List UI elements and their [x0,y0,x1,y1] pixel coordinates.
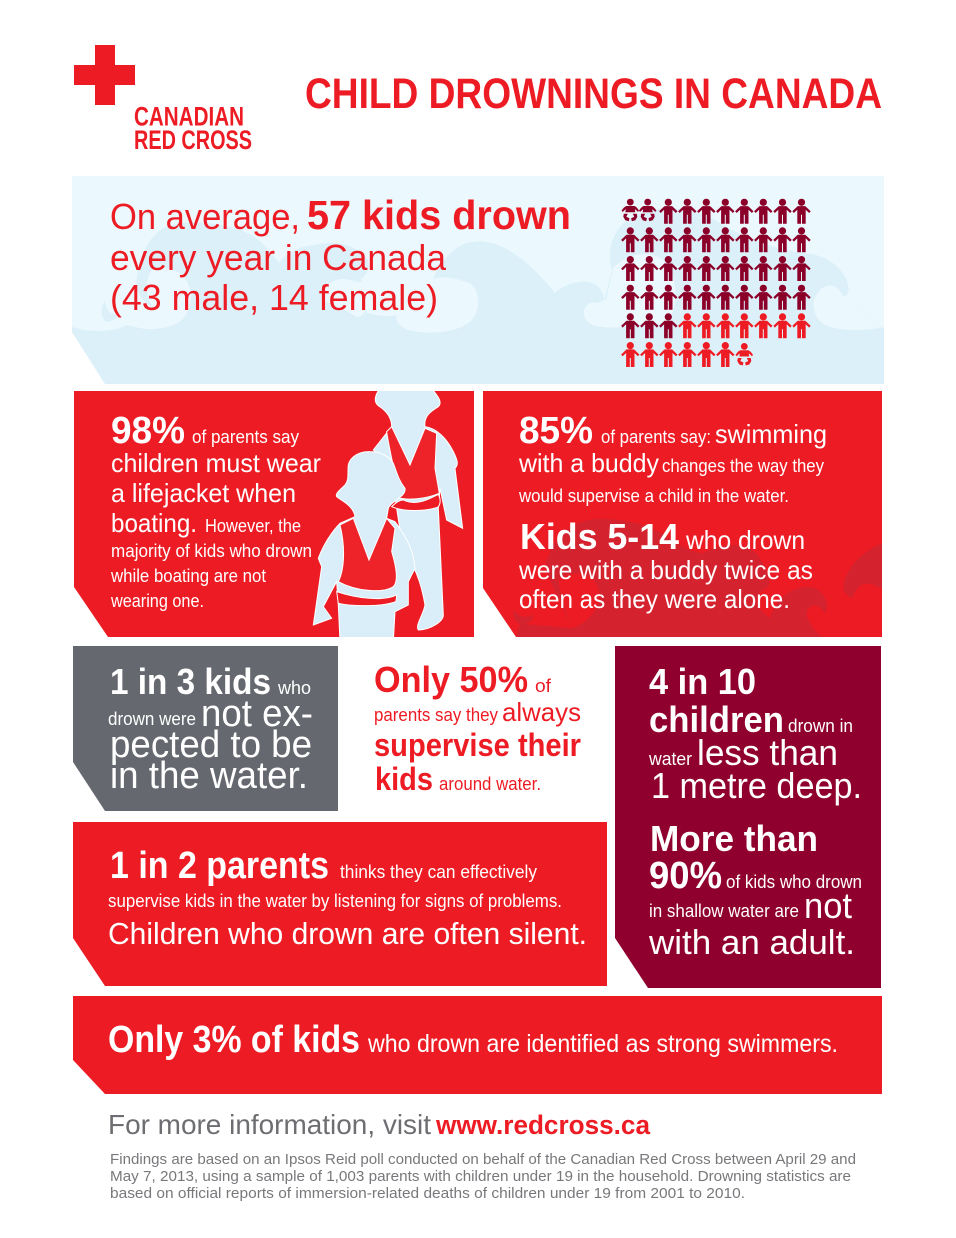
text: 98% of parents: majority of kids who drown [111,541,312,561]
footnote: based on official reports of immersion-related deaths of children under 19 from 2001 to 2010. [110,1185,745,1202]
logo wordmark: CANADIAN [134,102,244,132]
text: kids 5-14: were with a buddy twice as [518,555,813,585]
text: 1 in 3 kids: drown were [108,709,196,729]
text: 98% of parents: 98% [111,410,185,452]
text: 1 in 2 parents: Children who drown are often silent. [108,916,587,951]
text: more than 90%: with an adult. [648,924,855,962]
panel: 85% buddy [483,391,883,637]
text: 98% of parents: a lifejacket when [111,478,296,508]
text block: only 50% [374,659,581,797]
text: 85% of parents [518,410,827,506]
footnote: May 7, 2013, using a sample of 1,003 parents with children under 19 in the household. Drowning statistics are [110,1168,851,1185]
footer: more information: www.redcross.ca [435,1110,651,1140]
heading: 57 kids drown: 57 kids drown [307,192,571,238]
text: 85% of parents: changes the way they [662,456,824,476]
icon: red cross [74,45,135,105]
text: 4 in 10: less than [697,732,838,773]
text block: only 50%: supervise their [374,727,581,763]
text: 98% of parents: wearing one. [110,591,204,611]
text: 4 in 10: 4 in 10 [649,661,756,702]
text: 98% of parents: while boating are not [110,566,266,586]
text: 1 in 2 parents [108,845,587,951]
icon array: 57 children [621,199,811,367]
text: 98% of parents [110,410,321,611]
panel: 1 in 2 parents [73,822,607,986]
logo wordmark [134,102,252,155]
text: 98% of parents: children must wear [111,448,321,478]
footnote: Findings are based on an Ipsos Reid poll conducted on behalf of the Canadian Red Cross between April 29 and [110,1151,856,1168]
text: 1 in 3 kids [108,661,313,797]
text: kids 5-14: Kids 5-14 [520,516,679,557]
heading: 57 kids drown: On average, [110,196,300,237]
text block: only 50%: always [502,697,581,727]
text: 85% of parents: swimming [715,419,827,449]
text: only 3% [108,1019,838,1061]
text: 4 in 10 [648,661,862,806]
text: more than 90%: in shallow water are [649,901,799,921]
title: CHILD DROWNINGS IN CANADA [305,70,882,118]
text block: only 50%: Only 50% [374,659,528,700]
text: more than 90%: More than [650,818,818,859]
text: 1 in 3 kids: in the water. [110,755,308,797]
text: 1 in 2 parents: 1 in 2 parents [110,845,329,887]
panel: 98% lifejacket [74,388,474,642]
footer: more information: For more information, visit [108,1109,431,1140]
text: only 3%: Only 3% of kids [108,1019,360,1061]
text block: only 50%: around water. [439,774,541,794]
text block: only 50%: parents say they [374,705,498,725]
text: 98% of parents: boating. [111,508,197,538]
text: 1 in 3 kids: 1 in 3 kids [110,661,271,702]
text: 98% of parents: of parents say [192,427,299,447]
text: 1 in 3 kids: pected to be [110,724,312,766]
text: more than 90% [648,818,862,962]
text: more than 90%: 90% [649,855,722,897]
text: kids 5-14 [518,516,813,614]
logo wordmark: RED CROSS [134,125,252,155]
text: 1 in 3 kids: who [277,678,311,698]
footnote [110,1151,856,1202]
footer: more information [108,1109,651,1140]
text: 1 in 2 parents: supervise kids in the water by listening for signs of problems. [108,891,562,911]
logo: Canadian Red Cross [74,45,252,155]
text block: only 50%: kids [375,761,433,797]
text: more than 90%: of kids who drown [726,872,862,892]
text: 4 in 10: 1 metre deep. [651,765,862,806]
heading: 57 kids drown [110,192,571,318]
text: 1 in 3 kids: not ex- [201,693,313,735]
heading: 57 kids drown: (43 male, 14 female) [110,277,438,318]
text: more than 90%: not [804,885,852,926]
text: 4 in 10: water [648,749,692,769]
text: 85% of parents: of parents say: [601,427,711,447]
panel: 1 in 3 kids [73,646,338,811]
waves background [72,208,884,390]
panel: 57 kids drown [72,176,884,390]
text: 85% of parents: would supervise a child in the water. [518,486,789,506]
text block: only 50%: of [535,676,552,696]
waves background [513,519,883,637]
text: 4 in 10: drown in [788,716,853,736]
text: kids 5-14: who drown [685,525,805,555]
text: only 3%: who drown are identified as strong swimmers. [367,1030,838,1058]
text: 85% of parents: with a buddy [518,448,659,478]
text: kids 5-14: often as they were alone. [519,584,790,614]
panel: 4 in 10 children [615,646,881,988]
text: 85% of parents: 85% [519,410,593,452]
heading: 57 kids drown: every year in Canada [110,237,447,278]
text: 4 in 10: children [649,699,784,740]
text: 98% of parents: However, the [205,516,301,536]
panel: only 3% of kids [73,996,882,1094]
illustration: two children in lifejackets [313,388,463,642]
text: 1 in 2 parents: thinks they can effectively [340,862,537,882]
